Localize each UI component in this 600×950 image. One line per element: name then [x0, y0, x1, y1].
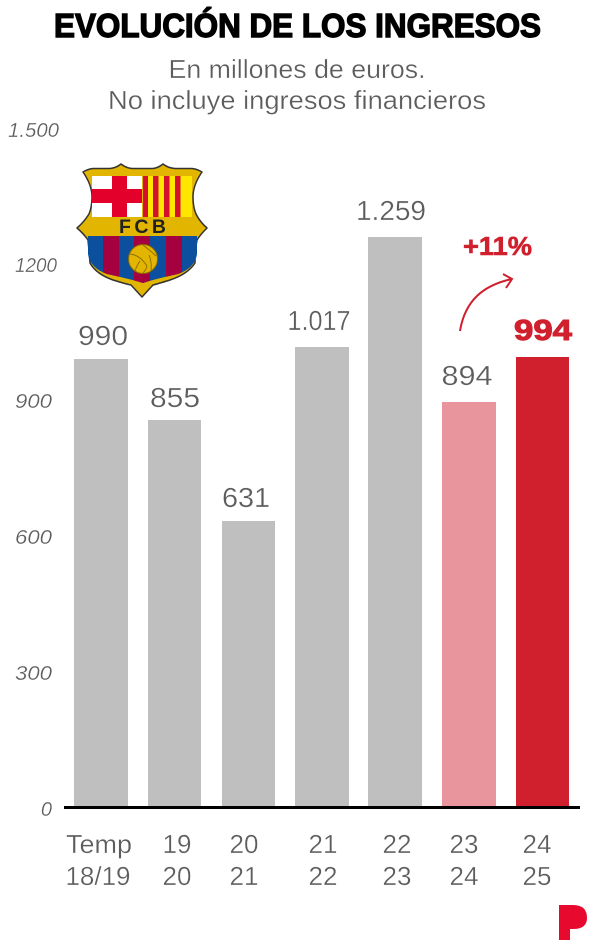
- growth label: +11%: [463, 231, 532, 261]
- bar 18/19: [74, 359, 128, 807]
- highlighted value: 994: [514, 315, 572, 347]
- x axis labels: [65, 829, 551, 891]
- bar value labels: 855: [150, 382, 200, 413]
- y axis labels: 600: [15, 527, 52, 549]
- title: EVOLUCIÓN DE LOS INGRESOS: [54, 7, 541, 44]
- y axis labels: 300: [15, 663, 52, 685]
- x axis labels: 24: [523, 829, 551, 859]
- y axis labels: 1200: [15, 255, 57, 277]
- icon: football: [128, 244, 158, 274]
- arrow: [460, 274, 512, 331]
- bar 22/23: [368, 237, 422, 807]
- bar 24/25: [516, 357, 569, 807]
- x axis labels: 21: [309, 829, 337, 859]
- bar value labels: 631: [222, 482, 270, 513]
- bar 19/20: [148, 420, 201, 807]
- y axis labels: 1.500: [8, 120, 59, 142]
- bar 20/21: [222, 521, 275, 807]
- bar 23/24: [442, 402, 496, 807]
- x axis labels: 19: [163, 829, 191, 859]
- bar value labels: 990: [78, 320, 128, 351]
- subtitle: [108, 54, 486, 115]
- bar chart: [64, 237, 580, 809]
- x axis labels: 20: [163, 861, 191, 891]
- subtitle: En millones de euros.: [168, 54, 426, 84]
- x axis labels: 20: [230, 829, 258, 859]
- x axis labels: 24: [450, 861, 478, 891]
- bar 21/22: [295, 347, 349, 807]
- bar value labels: 1.017: [288, 305, 350, 336]
- icon: FC Barcelona crest: [77, 164, 207, 297]
- subtitle: No incluye ingresos financieros: [108, 85, 486, 115]
- x axis labels: 22: [309, 861, 337, 891]
- x axis labels: 21: [230, 861, 258, 891]
- x axis labels: 22: [383, 829, 411, 859]
- axis baseline: [64, 806, 580, 809]
- bar value labels: [78, 195, 492, 513]
- x axis labels: 18/19: [65, 861, 131, 891]
- y axis labels: 900: [15, 391, 52, 413]
- x axis labels: 23: [383, 861, 411, 891]
- y axis labels: 0: [41, 799, 52, 821]
- x axis labels: 23: [450, 829, 478, 859]
- y axis labels: [8, 120, 59, 821]
- bar value labels: 1.259: [356, 195, 426, 226]
- bar value labels: 894: [442, 360, 492, 391]
- x axis labels: Temp: [66, 829, 132, 859]
- icon: FC Barcelona crest: FCB: [119, 216, 166, 238]
- icon: publisher logo: [559, 905, 587, 940]
- x axis labels: 25: [523, 861, 551, 891]
